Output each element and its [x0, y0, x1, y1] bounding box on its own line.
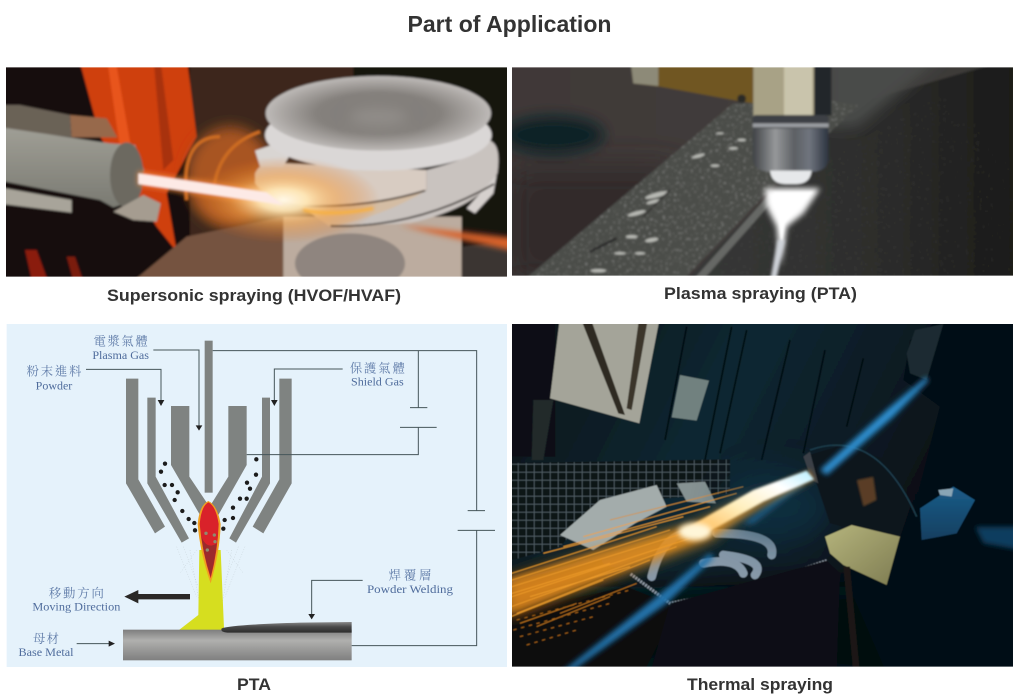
caption: thermal spraying: Thermal spraying — [687, 675, 833, 694]
caption: supersonic spraying: Supersonic spraying (HVOF/HVAF) — [107, 286, 401, 305]
arrow: moving direction — [124, 590, 190, 603]
label: shield gas: Shield Gas — [351, 377, 404, 389]
arrow: base metal — [77, 641, 115, 647]
panel: plasma spraying photo — [512, 67, 1013, 276]
arrow: shield gas — [271, 369, 343, 406]
base metal — [123, 630, 352, 660]
label: moving direction: 移動方向 — [49, 585, 104, 600]
label: base metal — [18, 631, 73, 659]
molten yellow pool — [179, 550, 224, 630]
label: powder: Powder — [36, 380, 73, 392]
label: moving direction: Moving Direction — [32, 602, 121, 614]
title: Part of Application — [408, 11, 612, 37]
arrow: plasma gas — [153, 350, 202, 431]
label: plasma gas — [92, 334, 149, 362]
label: shield gas — [350, 360, 405, 389]
caption: plasma spraying: Plasma spraying (PTA) — [664, 284, 857, 303]
panel: PTA diagram — [7, 324, 507, 667]
powder particles — [159, 457, 258, 532]
label: powder welding: Powder Welding — [367, 584, 453, 596]
electrode — [205, 341, 213, 493]
label: plasma gas: Plasma Gas — [92, 350, 149, 362]
label: powder welding: 焊覆層 — [389, 567, 431, 582]
circuit wiring — [213, 351, 495, 646]
label: powder: 粉末進料 — [26, 364, 81, 379]
powder welding bead — [221, 622, 352, 633]
label: base metal: Base Metal — [18, 647, 73, 659]
arrow: powder welding — [308, 580, 363, 619]
label: moving direction — [32, 585, 121, 614]
arrow: powder — [86, 369, 164, 406]
panel: supersonic spraying photo — [6, 67, 507, 277]
caption: PTA: PTA — [237, 675, 271, 694]
nozzle walls — [126, 379, 292, 543]
label: powder welding — [367, 567, 453, 596]
spray mist — [177, 547, 245, 607]
label: powder — [26, 364, 81, 392]
panel: thermal spraying photo — [507, 317, 1018, 673]
plasma flame — [198, 501, 221, 583]
label: base metal: 母材 — [33, 631, 59, 646]
label: plasma gas: 電漿氣體 — [94, 334, 148, 349]
label: shield gas: 保護氣體 — [350, 360, 405, 375]
